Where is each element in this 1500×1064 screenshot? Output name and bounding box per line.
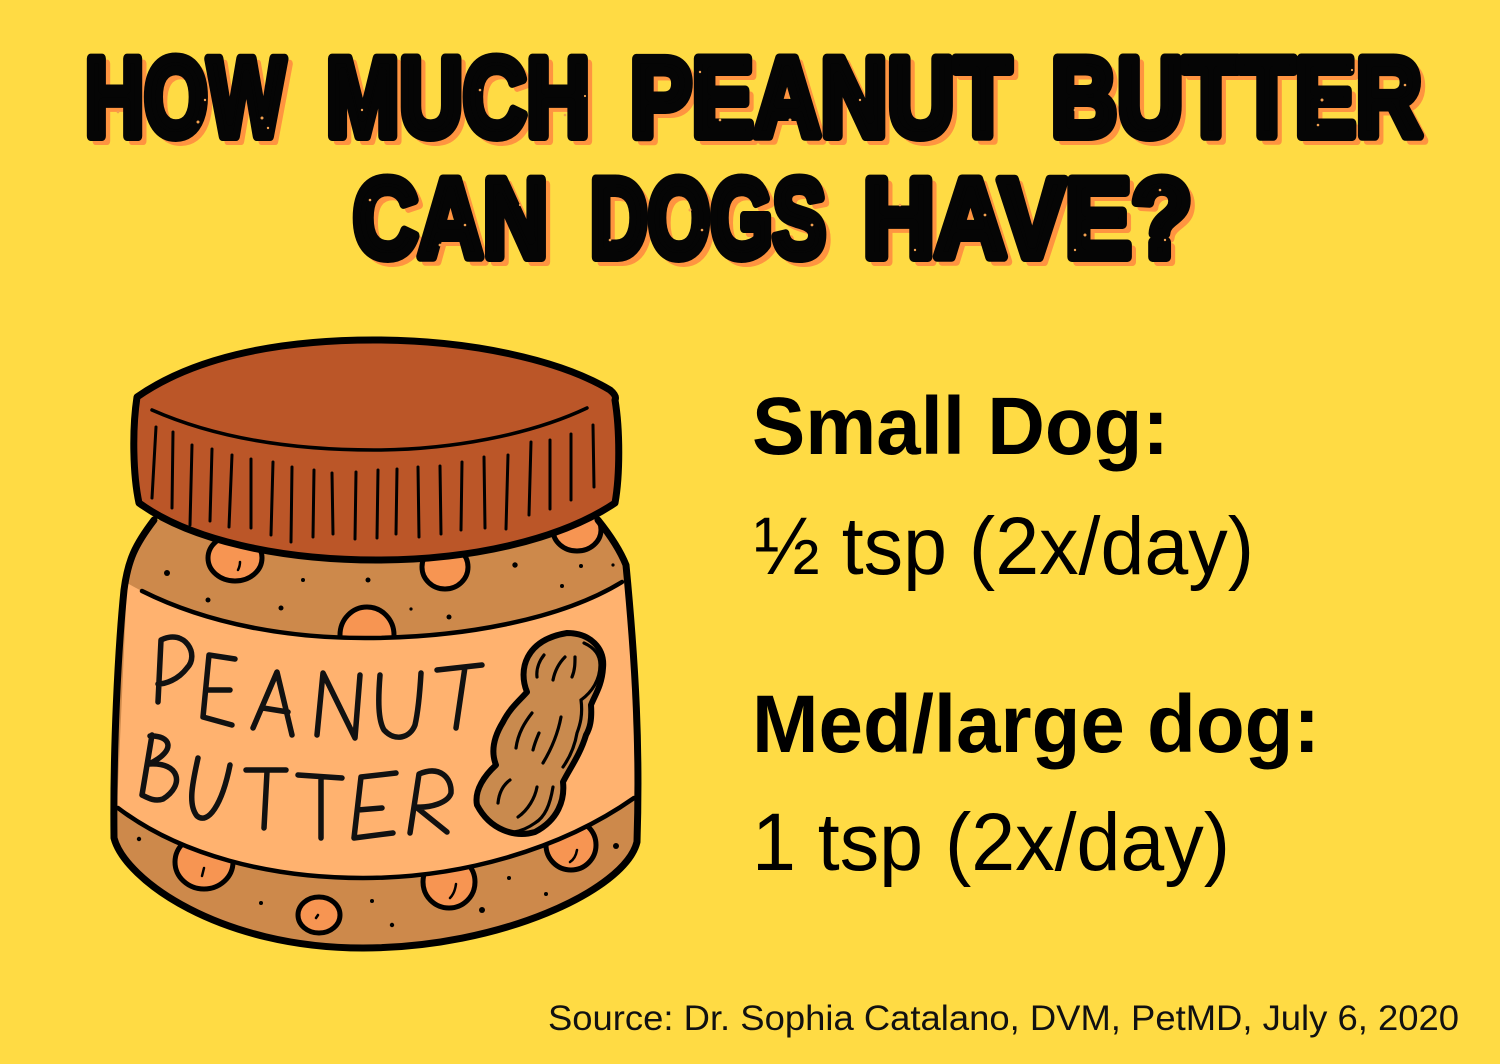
- icon: peanut butter jar: [114, 340, 638, 948]
- title lettering: HAVE?: [863, 156, 1192, 281]
- title lettering: PEANUT: [630, 35, 1011, 160]
- label edges: [118, 582, 634, 878]
- medium large dog dose: 1 tsp (2x/day): [752, 797, 1230, 888]
- title shadow: HOW: [90, 40, 290, 165]
- jar outline: [114, 520, 638, 948]
- jar body fill: [114, 520, 638, 948]
- title lettering: DOGS: [590, 156, 826, 281]
- spot marks and specks: [137, 562, 619, 927]
- title shadow: DOGS: [595, 161, 831, 286]
- title lettering: [85, 35, 1422, 281]
- title lettering: HOW: [85, 35, 285, 160]
- title shadow: CAN: [358, 161, 553, 286]
- dosage text: [752, 381, 1320, 888]
- title shadow: BUTTER: [1056, 40, 1427, 165]
- source: Source: Dr. Sophia Catalano, DVM, PetMD, July 6, 2020: [548, 999, 1459, 1038]
- title shadow: MUCH: [331, 40, 595, 165]
- lid rim line: [152, 408, 587, 450]
- peanut icon: [476, 633, 603, 834]
- title shadow: PEANUT: [635, 40, 1016, 165]
- medium large dog heading: Med/large dog:: [752, 679, 1320, 770]
- title shadow: [90, 40, 1427, 286]
- title speckles: [117, 69, 1406, 251]
- peanut spots: [175, 509, 601, 933]
- jar lid: [134, 340, 619, 560]
- label text: peanut butter: [142, 637, 482, 838]
- small dog heading: Small Dog:: [752, 381, 1169, 472]
- title lettering: CAN: [353, 156, 548, 281]
- title lettering: MUCH: [326, 35, 590, 160]
- title lettering: BUTTER: [1051, 35, 1422, 160]
- jar label: [117, 578, 636, 878]
- title shadow: HAVE?: [868, 161, 1197, 286]
- small dog dose: ½ tsp (2x/day): [754, 501, 1254, 592]
- lid ridges: [152, 425, 594, 542]
- title: [85, 35, 1427, 286]
